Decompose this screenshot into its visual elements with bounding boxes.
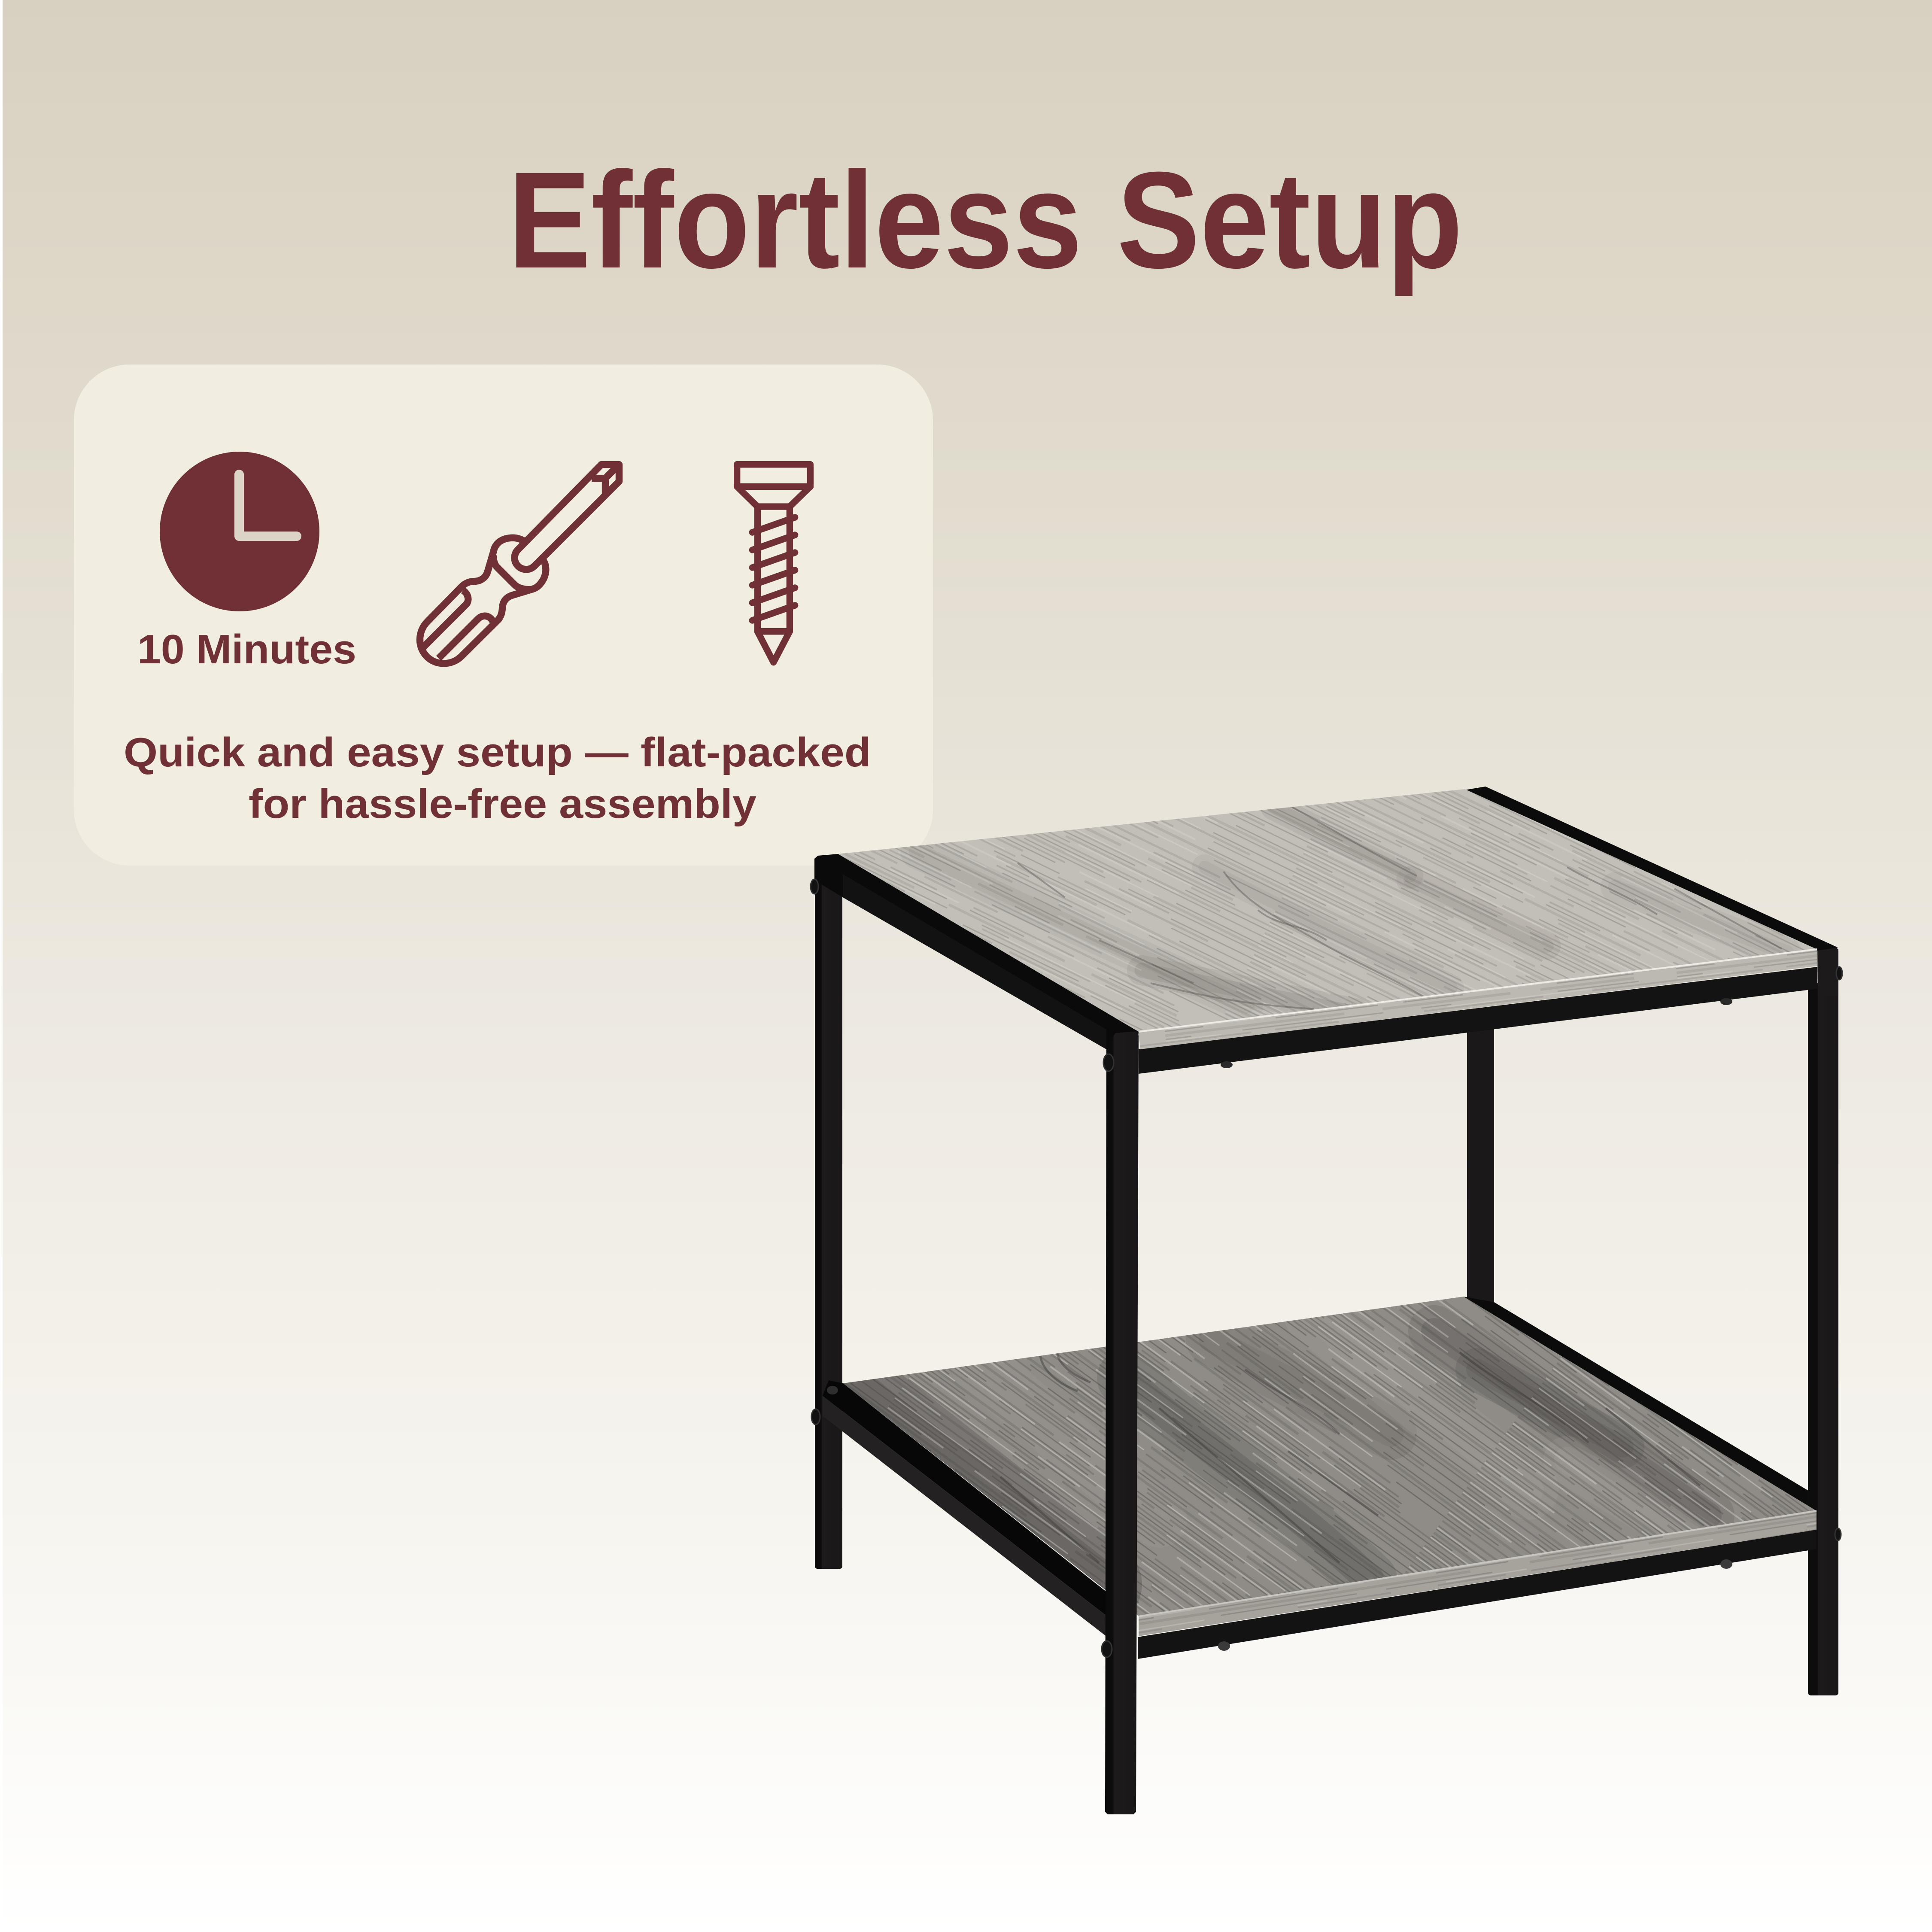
upper shelf frame xyxy=(814,787,1838,1074)
description text xyxy=(124,729,871,827)
lower front apron xyxy=(1138,1530,1817,1659)
rear right leg xyxy=(1467,1022,1494,1305)
icon: clock xyxy=(160,452,319,611)
icon: screw xyxy=(737,465,810,662)
lower shelf wood top xyxy=(843,1297,1815,1616)
lower left rail xyxy=(823,1380,1106,1636)
lower shelf front edge xyxy=(1139,1511,1817,1636)
upper shelf front edge xyxy=(1139,949,1817,1049)
upper shelf wood top xyxy=(838,789,1815,1032)
title: Effortless Setup xyxy=(508,143,1463,298)
rear left leg xyxy=(815,859,842,1569)
panel: setup info xyxy=(74,365,933,866)
front right leg xyxy=(1808,947,1838,1695)
left edge strip xyxy=(0,0,3,1932)
side table product illustration xyxy=(811,773,1846,1814)
description text: Quick and easy setup — flat-packed xyxy=(124,729,871,775)
front left leg xyxy=(1105,1031,1139,1814)
lower back rail xyxy=(1464,1297,1808,1516)
icon: screwdriver xyxy=(420,465,619,663)
clock label: 10 Minutes xyxy=(137,626,356,672)
description text: for hassle-free assembly xyxy=(249,781,756,827)
bolts xyxy=(811,879,1842,1657)
